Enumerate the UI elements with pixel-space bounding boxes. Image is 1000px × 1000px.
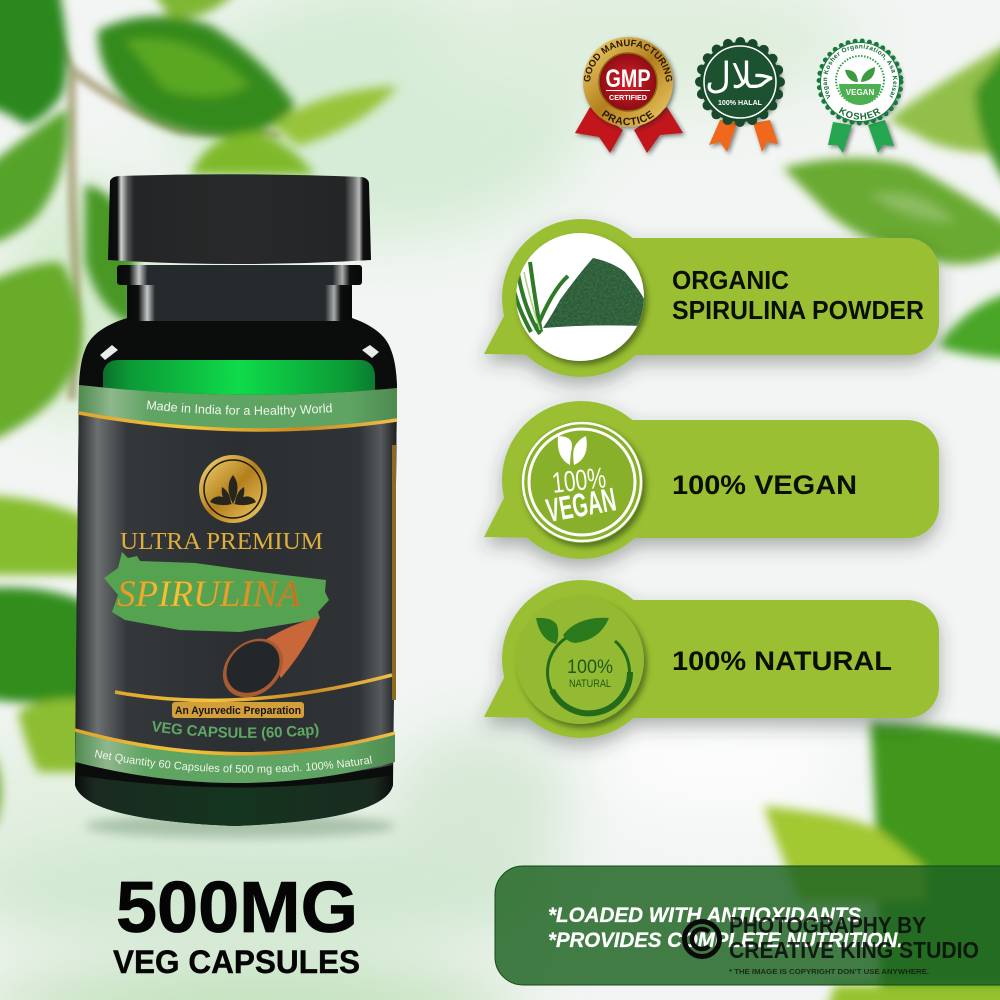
powder image circle	[514, 233, 646, 361]
panel shape	[484, 401, 939, 559]
badge: halal: 100% HALAL	[718, 98, 762, 107]
ribbons	[828, 120, 894, 153]
benefit lines	[548, 904, 903, 952]
label: 100% natural: 100% NATURAL	[672, 646, 892, 676]
panel shape	[484, 580, 939, 738]
shoulder highlights	[100, 345, 379, 360]
lower gold curve	[115, 675, 392, 700]
watermark: CREATIVE KING STUDIO	[729, 937, 979, 963]
badge: vegan kosher: KOSHER	[838, 107, 881, 120]
bottle body	[75, 318, 397, 826]
bottle	[74, 174, 398, 843]
top gold line	[79, 413, 397, 430]
label dark background	[75, 385, 397, 779]
icon: natural leaf ring	[516, 596, 644, 724]
top green band	[79, 385, 397, 430]
ribbons	[709, 120, 778, 152]
logo	[199, 455, 267, 523]
ayurvedic tag: An Ayurvedic Preparation	[175, 705, 301, 717]
label: organic spirulina powder: SPIRULINA POWDER	[672, 295, 924, 325]
label: organic spirulina powder	[672, 265, 924, 325]
badge: vegan kosher: VEGAN	[846, 88, 874, 97]
made in india text: Made in India for a Healthy World	[147, 400, 332, 417]
cap lip	[117, 265, 362, 285]
icon: vegan stamp: 100%	[551, 462, 608, 500]
panel: organic spirulina powder	[484, 219, 939, 377]
heading: veg capsules: VEG CAPSULES	[113, 944, 360, 980]
callout: benefits band	[495, 866, 1000, 985]
net quantity text: Net Quantity 60 Capsules of 500 mg each. 100% Natural	[94, 750, 372, 775]
badge: GMP certified	[575, 36, 687, 156]
spoon	[211, 617, 320, 709]
bottle cap	[108, 174, 371, 264]
watermark: PHOTOGRAPHY BY	[729, 912, 926, 938]
badge: GMP certified: CERTIFIED	[609, 93, 648, 102]
panel: 100% vegan	[484, 401, 939, 559]
icon: natural leaf ring: 100%	[567, 657, 613, 678]
bottom green band	[75, 730, 395, 783]
bottle shadow	[85, 814, 395, 838]
bottom base	[75, 775, 393, 826]
side stripe	[392, 445, 396, 700]
green glow	[103, 360, 375, 396]
label: 100% vegan: 100% VEGAN	[672, 470, 857, 500]
badge: GMP certified: GMP	[606, 65, 650, 93]
watermark: * THE IMAGE IS COPYRIGHT DON'T USE ANYWHERE.	[729, 967, 929, 976]
bottom gold line	[75, 730, 395, 754]
badge: vegan kosher: Vegan Kosher Organization, Asa Keisar	[824, 44, 898, 100]
badge: halal	[700, 42, 780, 152]
icon: natural leaf ring: NATURAL	[569, 678, 611, 690]
panel: 100% natural	[484, 580, 939, 738]
ultra premium heading: ULTRA PREMIUM	[120, 529, 323, 555]
veg capsule text: VEG CAPSULE (60 Cap)	[152, 720, 318, 741]
label: organic spirulina powder: ORGANIC	[672, 265, 789, 295]
icon: vegan stamp: VEGAN	[543, 480, 619, 529]
badge: vegan kosher	[816, 38, 905, 156]
brush stroke	[104, 552, 329, 632]
branch	[30, 0, 280, 400]
badge: GMP certified: GOOD MANUFACTURING	[584, 39, 672, 82]
panel shape	[484, 219, 939, 377]
ribbons	[575, 107, 683, 153]
badge: GMP certified: PRACTICE	[602, 110, 654, 126]
spirulina title: SPIRULINA	[117, 574, 300, 615]
badge: halal: حلال	[705, 56, 775, 97]
heading: 500MG: 500MG	[116, 868, 358, 948]
benefit lines: *PROVIDES COMPLETE NUTRITION.	[548, 929, 903, 952]
icon: vegan stamp	[521, 421, 643, 543]
bottle neck	[127, 283, 352, 321]
icon: copyright	[684, 922, 720, 956]
benefit lines: *LOADED WITH ANTIOXIDANTS	[548, 904, 861, 927]
watermark	[684, 912, 979, 976]
